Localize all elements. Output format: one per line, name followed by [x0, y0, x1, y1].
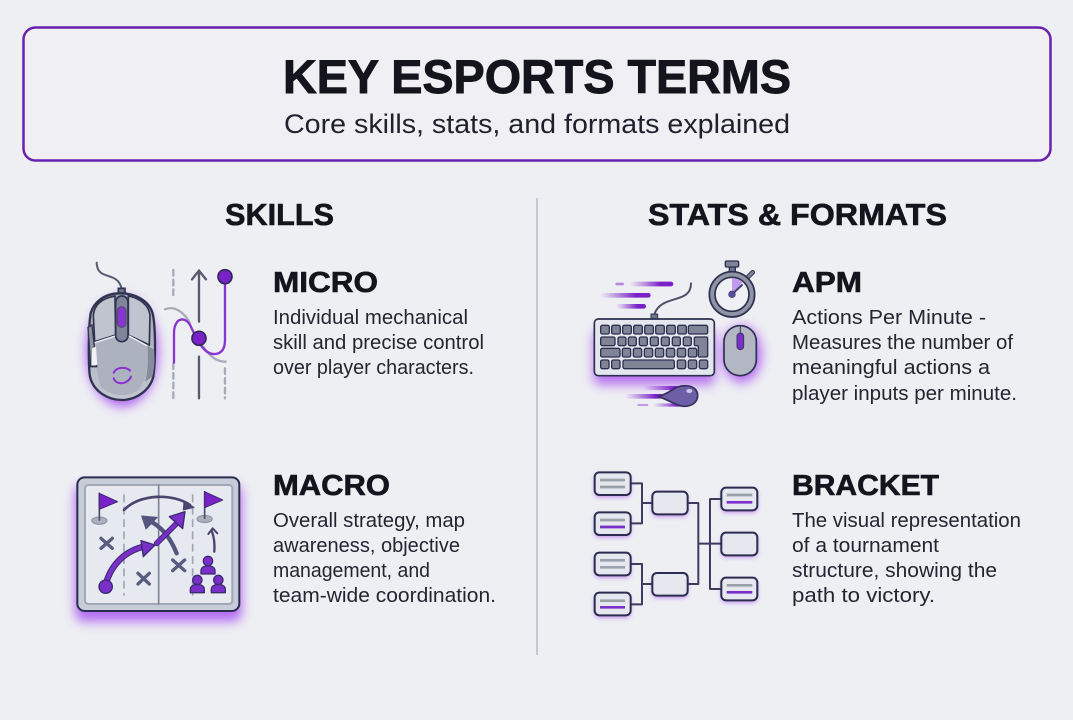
text block: apm: Actions Per Minute - — [792, 307, 986, 329]
icon: tournament bracket — [595, 472, 757, 618]
text block: bracket — [792, 470, 1021, 607]
heading: skills: SKILLS — [225, 197, 334, 232]
text block: apm: Measures the number of — [792, 332, 1013, 354]
text block: macro: team-wide coordination. — [273, 585, 496, 607]
icon: tactical map — [75, 477, 242, 622]
header panel — [24, 28, 1050, 160]
text block: macro: Overall strategy, map — [273, 510, 465, 532]
text block: micro: over player characters. — [273, 357, 474, 379]
icon: mouse with movement paths — [86, 263, 232, 407]
text block: apm — [792, 267, 1017, 405]
text block: micro — [273, 267, 484, 379]
text block: bracket: of a tournament — [792, 535, 939, 557]
text block: macro — [273, 470, 496, 607]
text block: macro: awareness, objective — [273, 535, 460, 557]
text block: apm: meaningful actions a — [792, 357, 991, 379]
icon: keyboard, stopwatch and mouse — [593, 261, 762, 407]
text block: micro: skill and precise control — [273, 332, 484, 354]
text block: bracket: structure, showing the — [792, 560, 997, 582]
heading: stats and formats: STATS & FORMATS — [648, 197, 947, 232]
text block: micro: Individual mechanical — [273, 307, 468, 329]
text block: apm: player inputs per minute. — [792, 383, 1017, 405]
text block: bracket: path to victory. — [792, 585, 935, 607]
text block: bracket: BRACKET — [792, 470, 940, 502]
subtitle: Core skills, stats, and formats explained — [284, 109, 790, 139]
text block: macro: MACRO — [273, 470, 390, 502]
text block: bracket: The visual representation — [792, 510, 1021, 532]
text block: micro: MICRO — [273, 267, 378, 299]
text block: macro: management, and — [273, 560, 430, 582]
title: KEY ESPORTS TERMS — [283, 50, 791, 103]
text block: apm: APM — [792, 267, 862, 299]
